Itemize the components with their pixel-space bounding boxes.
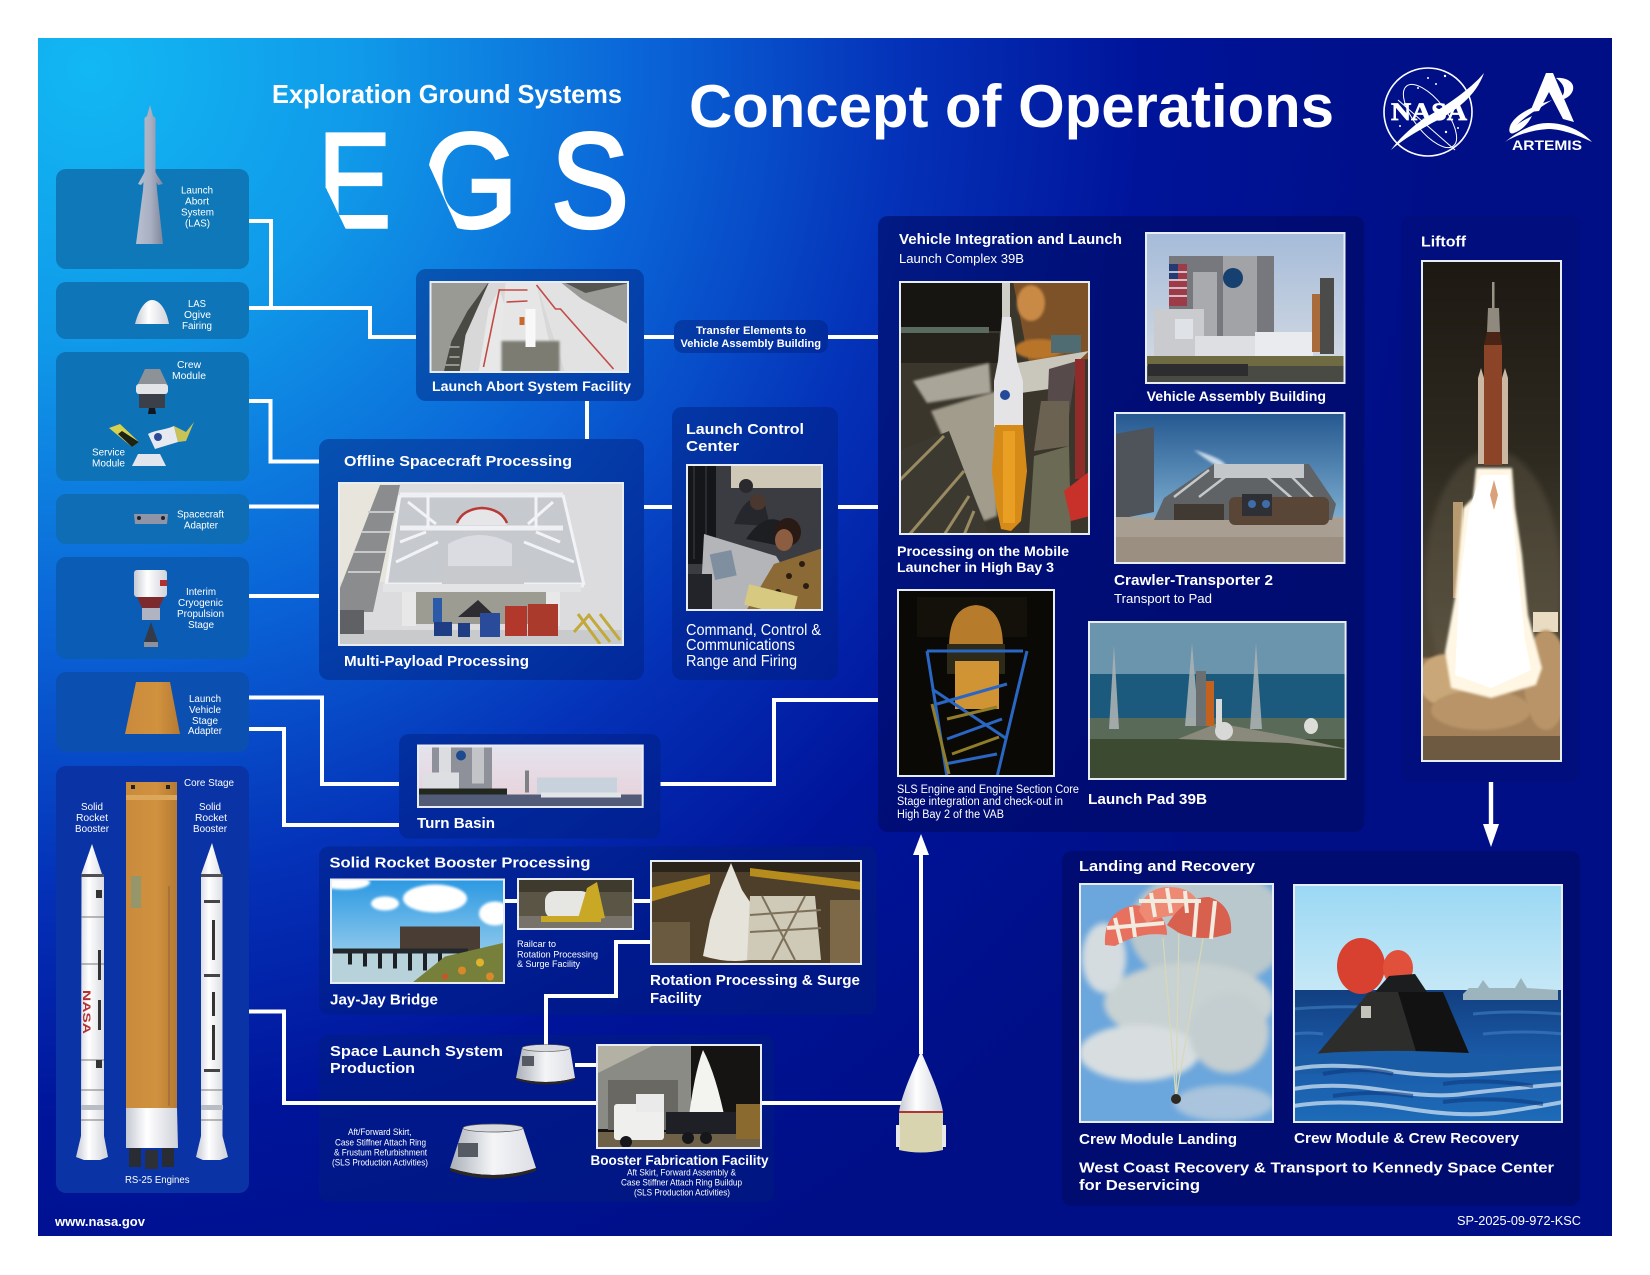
photo: LAS facility interior [430, 281, 629, 373]
icon: spacecraft adapter [134, 514, 168, 524]
logo: EGS letters: S [551, 105, 629, 256]
heading: Space Launch System Production: Space Launch System [330, 1043, 503, 1060]
caption: Railcar to Rotation Processing & Surge Facility: & Surge Facility [517, 959, 580, 970]
caption: SLS Engine and Engine Section Core Stage integration: Stage integration and check-out in [897, 796, 1063, 808]
logo: Artemis [1505, 73, 1592, 153]
arrow: booster assembly to vehicle integration [913, 834, 929, 1054]
icon: small forward skirt [516, 1044, 575, 1084]
panel: Launch Abort System Facility [416, 269, 644, 401]
label: left Solid Rocket Booster [75, 802, 110, 835]
label: Spacecraft Adapter: Adapter [184, 520, 219, 532]
text: aft skirt and forward assembly activities: (SLS Production Activities) [634, 1188, 730, 1199]
caption: Processing on the Mobile Launcher in High Bay 3: Processing on the Mobile [897, 543, 1069, 559]
caption: Rotation Processing & Surge Facility: Rotation Processing & Surge [650, 972, 860, 989]
icon: ICPS stage [134, 570, 167, 647]
label: Spacecraft Adapter: Spacecraft [177, 510, 224, 520]
label: left Solid Rocket Booster: Solid [81, 802, 103, 813]
text: Command, Control & Communications, Range and Firing: Command, Control & [686, 622, 822, 639]
photo: railcar with booster segment [517, 878, 634, 930]
icon: left solid rocket booster [76, 844, 108, 1160]
icon: left solid rocket booster: NASA [80, 990, 92, 1034]
logo: EGS letters [326, 131, 626, 230]
connector lines between elements and facilities [249, 221, 905, 1103]
heading: Vehicle Integration and Launch: Vehicle Integration and Launch [899, 231, 1122, 248]
logo: EGS letters: G [423, 105, 518, 256]
label: Interim Cryogenic Propulsion Stage: Interim [186, 587, 216, 598]
icon: core stage [126, 782, 178, 1169]
heading: Launch Control Center [686, 421, 804, 455]
icon: crew module [136, 369, 168, 414]
label: left Solid Rocket Booster: Rocket [76, 813, 108, 824]
panel: Solid Rocket Booster Processing [319, 846, 877, 1014]
photo: Vehicle Assembly Building [1145, 232, 1346, 384]
caption: Turn Basin: Turn Basin [417, 815, 495, 832]
logo: NASA meatball [1384, 68, 1484, 156]
panel: Liftoff [1401, 216, 1580, 782]
label: Interim Cryogenic Propulsion Stage [177, 587, 224, 631]
label: Core Stage: Core Stage [184, 778, 234, 789]
panel: Turn Basin [399, 734, 660, 838]
text: West Coast Recovery & Transport: West Coast Recovery & Transport to Kennedy Space Center [1079, 1160, 1554, 1177]
caption: SLS Engine and Engine Section Core Stage integration: SLS Engine and Engine Section Core [897, 784, 1079, 796]
label: Crew Module [172, 360, 206, 382]
photo: rocket on mobile launcher in high bay [899, 281, 1090, 535]
icon: launch abort system tower [136, 105, 163, 244]
panel: Offline Spacecraft Processing [319, 439, 644, 680]
panel: Vehicle Integration and Launch [878, 216, 1364, 832]
icon: stage adapter cone [125, 682, 180, 734]
icon: assembled booster nose cone [896, 1051, 946, 1152]
caption: Processing on the Mobile Launcher in High Bay 3 [897, 543, 1069, 575]
label: right Solid Rocket Booster: Rocket [195, 813, 227, 824]
label: LAS Ogive Fairing: LAS [188, 299, 206, 310]
text: Command, Control & Communications, Range and Firing: Communications [686, 637, 795, 654]
photo: Booster Fabrication Facility [596, 1044, 762, 1149]
label: Spacecraft Adapter [177, 510, 224, 532]
photo: control room [686, 464, 823, 611]
text: aft and forward skirt activities: (SLS Production Activities) [332, 1158, 428, 1169]
label: left Solid Rocket Booster: Booster [75, 824, 110, 835]
label: Service Module [92, 448, 125, 470]
caption: Vehicle Assembly Building: Vehicle Assembly Building [1147, 388, 1326, 404]
label: RS-25 Engines: RS-25 Engines [125, 1175, 190, 1186]
caption: Rotation Processing & Surge Facility [650, 972, 860, 1007]
caption: SLS Engine and Engine Section Core Stage integration: High Bay 2 of the VAB [897, 809, 1004, 821]
photo: rocket at liftoff [1421, 260, 1562, 762]
label: Launch Vehicle Stage Adapter: Vehicle [189, 705, 221, 716]
icon: large aft skirt [450, 1124, 536, 1178]
photo: crew module recovery at sea [1293, 884, 1563, 1123]
label: Crew Module: Crew [177, 360, 202, 371]
caption: Jay-Jay Bridge: Jay-Jay Bridge [330, 992, 438, 1008]
label: Launch Abort System [181, 186, 214, 230]
panel: Launch Abort System element [56, 105, 249, 269]
caption: Processing on the Mobile Launcher in High Bay 3: Launcher in High Bay 3 [897, 559, 1054, 575]
panel: Interim Cryogenic Propulsion Stage element [56, 557, 249, 659]
label: Interim Cryogenic Propulsion Stage: Propulsion [177, 609, 224, 620]
label: right Solid Rocket Booster [193, 802, 228, 835]
text: aft and forward skirt activities: Aft/Forward Skirt, [348, 1127, 412, 1138]
text: aft skirt and forward assembly activities: Case Stiffner Attach Ring Buildup [621, 1178, 742, 1189]
photo: SLS engine section in high bay [897, 589, 1055, 777]
label: Launch Vehicle Stage Adapter [188, 694, 223, 737]
label: right Solid Rocket Booster: Solid [199, 802, 221, 813]
photo: Rotation Processing and Surge Facility [650, 860, 862, 965]
caption: Crew Module Landing: Crew Module Landing [1079, 1131, 1237, 1148]
logo: NASA meatball: NASA [1391, 99, 1467, 126]
panel: Landing and Recovery [1062, 851, 1580, 1206]
panel: Launch Control Center [672, 407, 838, 680]
label: Launch Vehicle Stage Adapter: Launch [189, 694, 221, 705]
label: Launch Vehicle Stage Adapter: Adapter [188, 726, 223, 737]
heading: Launch Control Center: Center [686, 438, 739, 455]
heading: Liftoff: Liftoff [1421, 234, 1467, 250]
panel: Crew and Service Module elements [56, 352, 249, 481]
text: Command, Control & Communications, Range and Firing: Range and Firing [686, 653, 797, 670]
photo: multi-payload processing facility [338, 482, 624, 646]
label: Interim Cryogenic Propulsion Stage: Cryogenic [178, 598, 223, 609]
photo: Launch Pad 39B [1088, 621, 1347, 780]
label: Interim Cryogenic Propulsion Stage: Stage [188, 620, 214, 631]
caption: Launch Abort System Facility: Launch Abort System Facility [432, 378, 631, 394]
label: Launch Vehicle Stage Adapter: Stage [192, 716, 218, 727]
logo: Artemis: ARTEMIS [1512, 137, 1582, 153]
text: West Coast Recovery & Transport [1079, 1160, 1554, 1194]
photo: crew module landing under parachutes [1079, 883, 1274, 1123]
text: aft skirt and forward assembly activities [621, 1168, 742, 1199]
heading: Space Launch System Production: Production [330, 1060, 415, 1077]
arrow: Liftoff to Landing [1483, 782, 1499, 847]
callout: Transfer Elements to Vehicle Assembly Building [674, 320, 828, 353]
text: aft and forward skirt activities [332, 1127, 428, 1169]
panel: Core Stage and Solid Rocket Boosters [56, 766, 249, 1193]
logo: EGS letters: E [318, 105, 391, 256]
label: Service Module: Module [92, 458, 125, 470]
photo: Jay-Jay Bridge [330, 878, 505, 984]
text: Command, Control & Communications, Range and Firing [686, 622, 822, 670]
text: aft and forward skirt activities: Case Stiffner Attach Ring [335, 1138, 426, 1148]
label: LAS Ogive Fairing [182, 299, 212, 332]
caption: Railcar to Rotation Processing & Surge Facility: Railcar to [517, 939, 556, 950]
subheading: Launch Complex 39B: Launch Complex 39B [899, 251, 1024, 266]
caption: Multi-Payload Processing: Multi-Payload Processing [344, 653, 529, 670]
photo: Crawler-Transporter 2 [1114, 412, 1346, 564]
heading: Landing and Recovery: Landing and Recovery [1079, 858, 1256, 875]
caption: Crawler-Transporter 2: Crawler-Transporter 2 [1114, 572, 1273, 589]
icon: ogive fairing [135, 300, 169, 324]
caption: Launch Pad 39B: Launch Pad 39B [1088, 791, 1207, 808]
panel: Space Launch System Production [319, 1035, 774, 1202]
heading: Launch Control Center: Launch Control [686, 421, 804, 438]
label: LAS Ogive Fairing: Fairing [182, 321, 212, 332]
callout: Transfer Elements to Vehicle Assembly Building: Transfer Elements to [696, 325, 806, 337]
panel: Spacecraft Adapter element [56, 494, 249, 544]
text: aft and forward skirt activities: & Frustum Refurbishment [334, 1148, 427, 1159]
icon: service module panels [109, 422, 194, 466]
heading: Solid Rocket Booster Processing: Solid Rocket Booster Processing [330, 855, 590, 872]
label: Launch Abort System: (LAS) [185, 218, 210, 230]
heading: Space Launch System Production [330, 1043, 503, 1077]
footer: website: www.nasa.gov [54, 1214, 146, 1229]
callout: Transfer Elements to Vehicle Assembly Building: Vehicle Assembly Building [680, 338, 821, 350]
label: Launch Abort System: Launch [181, 186, 213, 196]
heading: Exploration Ground Systems: Exploration Ground Systems [272, 79, 622, 109]
label: Service Module: Service [92, 448, 125, 458]
caption: Railcar to Rotation Processing & Surge Facility [517, 939, 598, 970]
label: Launch Abort System: Abort [185, 196, 209, 208]
caption: Railcar to Rotation Processing & Surge Facility: Rotation Processing [517, 950, 598, 960]
photo: turn basin with VAB [417, 744, 644, 808]
label: Launch Abort System: System [181, 208, 214, 218]
text: aft skirt and forward assembly activities: Aft Skirt, Forward Assembly & [627, 1168, 737, 1178]
title: Concept of Operations: Concept of Operations [689, 73, 1334, 140]
caption: SLS Engine and Engine Section Core Stage integration [897, 784, 1079, 821]
footer: document number: SP-2025-09-972-KSC [1457, 1214, 1581, 1228]
caption: Rotation Processing & Surge Facility: Facility [650, 990, 702, 1007]
subcaption: Transport to Pad: Transport to Pad [1114, 591, 1212, 606]
label: Crew Module: Module [172, 371, 206, 382]
text: West Coast Recovery & Transport: for Deservicing [1079, 1177, 1200, 1194]
caption: Crew Module & Crew Recovery: Crew Module & Crew Recovery [1294, 1130, 1520, 1147]
caption: Booster Fabrication Facility: Booster Fabrication Facility [590, 1152, 769, 1168]
label: right Solid Rocket Booster: Booster [193, 824, 228, 835]
panel: Launch Vehicle Stage Adapter element [56, 672, 249, 752]
heading: Offline Spacecraft Processing: Offline Spacecraft Processing [344, 453, 572, 470]
label: LAS Ogive Fairing: Ogive [184, 310, 211, 321]
panel: LAS Ogive Fairing element [56, 282, 249, 339]
icon: right solid rocket booster [196, 843, 228, 1160]
